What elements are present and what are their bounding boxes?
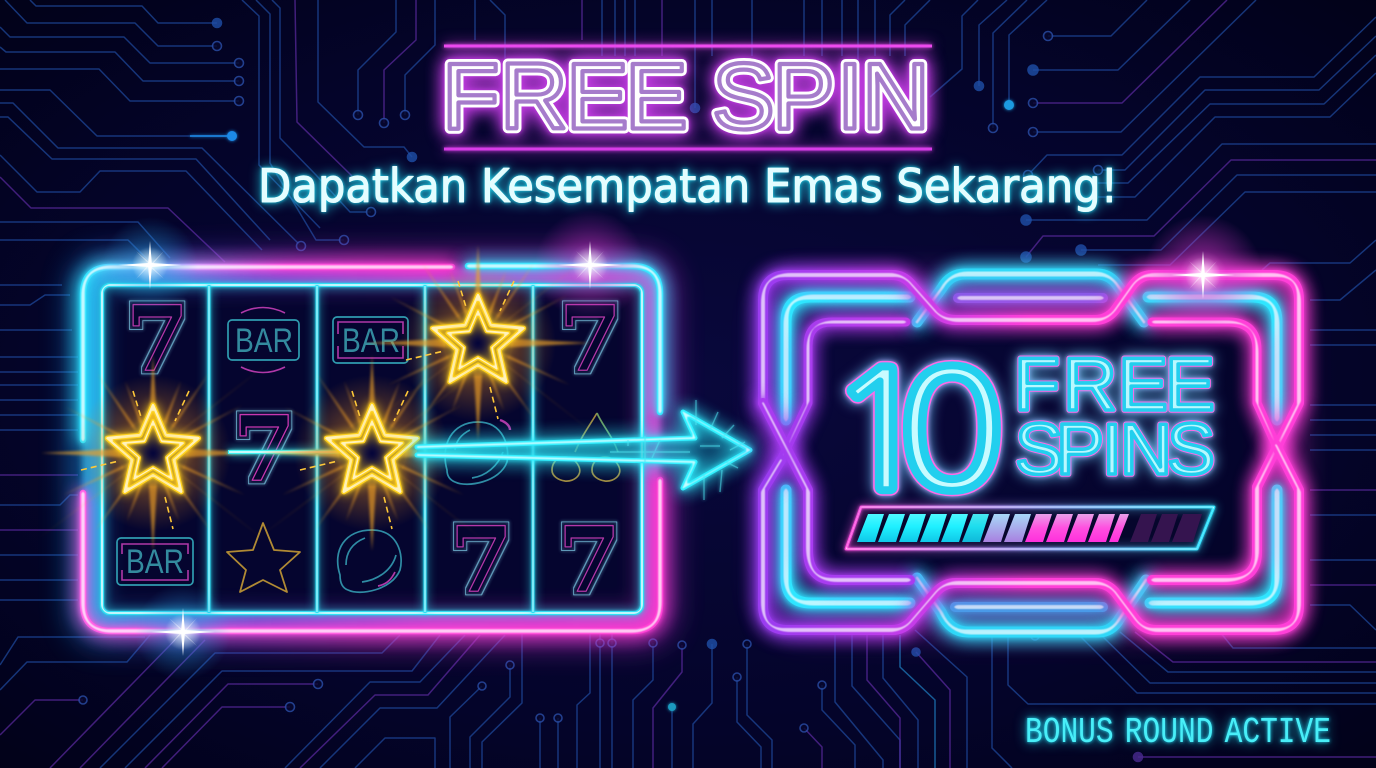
arrow	[417, 400, 750, 500]
arrow fill	[417, 412, 750, 488]
outer frame cyan-magenta top	[83, 267, 452, 440]
symbol: fruit r2c4	[445, 420, 510, 484]
reel dividers	[209, 285, 533, 613]
reward cyan corners	[786, 297, 1277, 603]
symbol: seven r3c4: 7	[450, 507, 513, 613]
progress bar segments	[857, 514, 1202, 542]
symbol: fruit r3c3	[338, 530, 401, 592]
slot frame band	[92, 276, 651, 622]
subtitle: Dapatkan Kesempatan Emas Sekarang!	[258, 159, 1118, 213]
outer frame magenta bottom	[83, 480, 660, 631]
symbol: seven r2c2: 7	[233, 396, 296, 502]
arrow sparks	[610, 400, 745, 500]
label FREE SPINS: FREE	[1014, 342, 1215, 426]
reward center bars	[955, 298, 1103, 607]
reward outer frame bottom	[763, 403, 910, 580]
label FREE SPINS	[1014, 342, 1215, 490]
symbol: bar r3c1	[117, 538, 193, 585]
corner flares	[102, 210, 645, 680]
arrow outline	[417, 412, 750, 488]
label FREE SPINS: FREE	[1014, 342, 1215, 426]
panel: slot machine	[35, 210, 660, 680]
title rule bottom	[444, 148, 932, 150]
progress bar frame	[846, 507, 1214, 549]
title text: FREE SPIN	[442, 44, 930, 148]
bright circuit nodes	[190, 100, 1014, 711]
symbol: seven r3c5: 7	[558, 507, 621, 613]
progress bar	[846, 507, 1214, 549]
reward lower loop	[763, 445, 1299, 630]
numeral 10: 10	[826, 348, 1006, 513]
title text: FREE SPIN	[442, 44, 930, 148]
reward inner frame	[781, 322, 1276, 460]
symbol: bar r1c2: BAR	[235, 322, 293, 360]
title rule top	[444, 44, 932, 48]
icon: winning star 2	[254, 355, 490, 551]
icon: winning star 3	[360, 245, 596, 441]
numeral 10: 10	[826, 348, 1006, 513]
inner frame	[102, 285, 642, 613]
symbol: bar r1c2	[228, 308, 299, 372]
symbol: bar r3c1: BAR	[126, 543, 184, 581]
symbol: bar r1c3	[333, 317, 408, 363]
title	[442, 44, 932, 149]
reel window	[102, 285, 642, 613]
win beam	[228, 450, 372, 454]
icon: winning star 1	[35, 355, 271, 551]
symbol: seven r1c5: 7	[559, 286, 622, 392]
reward outer frame top	[763, 275, 1299, 580]
symbol: seven r1c1: 7	[126, 286, 189, 392]
label FREE SPINS: SPINS	[1015, 410, 1215, 490]
symbol: cherries	[552, 413, 620, 481]
outer frame cyan top right	[468, 266, 660, 412]
symbol: bar r1c3: BAR	[342, 322, 400, 360]
numeral 10: 10	[826, 348, 1006, 513]
reward center cyan top arch	[917, 274, 1146, 632]
label FREE SPINS: SPINS	[1015, 410, 1215, 490]
panel: free spins reward	[763, 215, 1299, 632]
slot ambient glow	[83, 267, 660, 632]
reward ambient glow	[775, 290, 1287, 620]
reel window inner glow	[104, 287, 640, 611]
symbol: dim star	[227, 523, 300, 592]
flare on reward	[1143, 215, 1263, 335]
progress bar backing	[846, 507, 1214, 549]
